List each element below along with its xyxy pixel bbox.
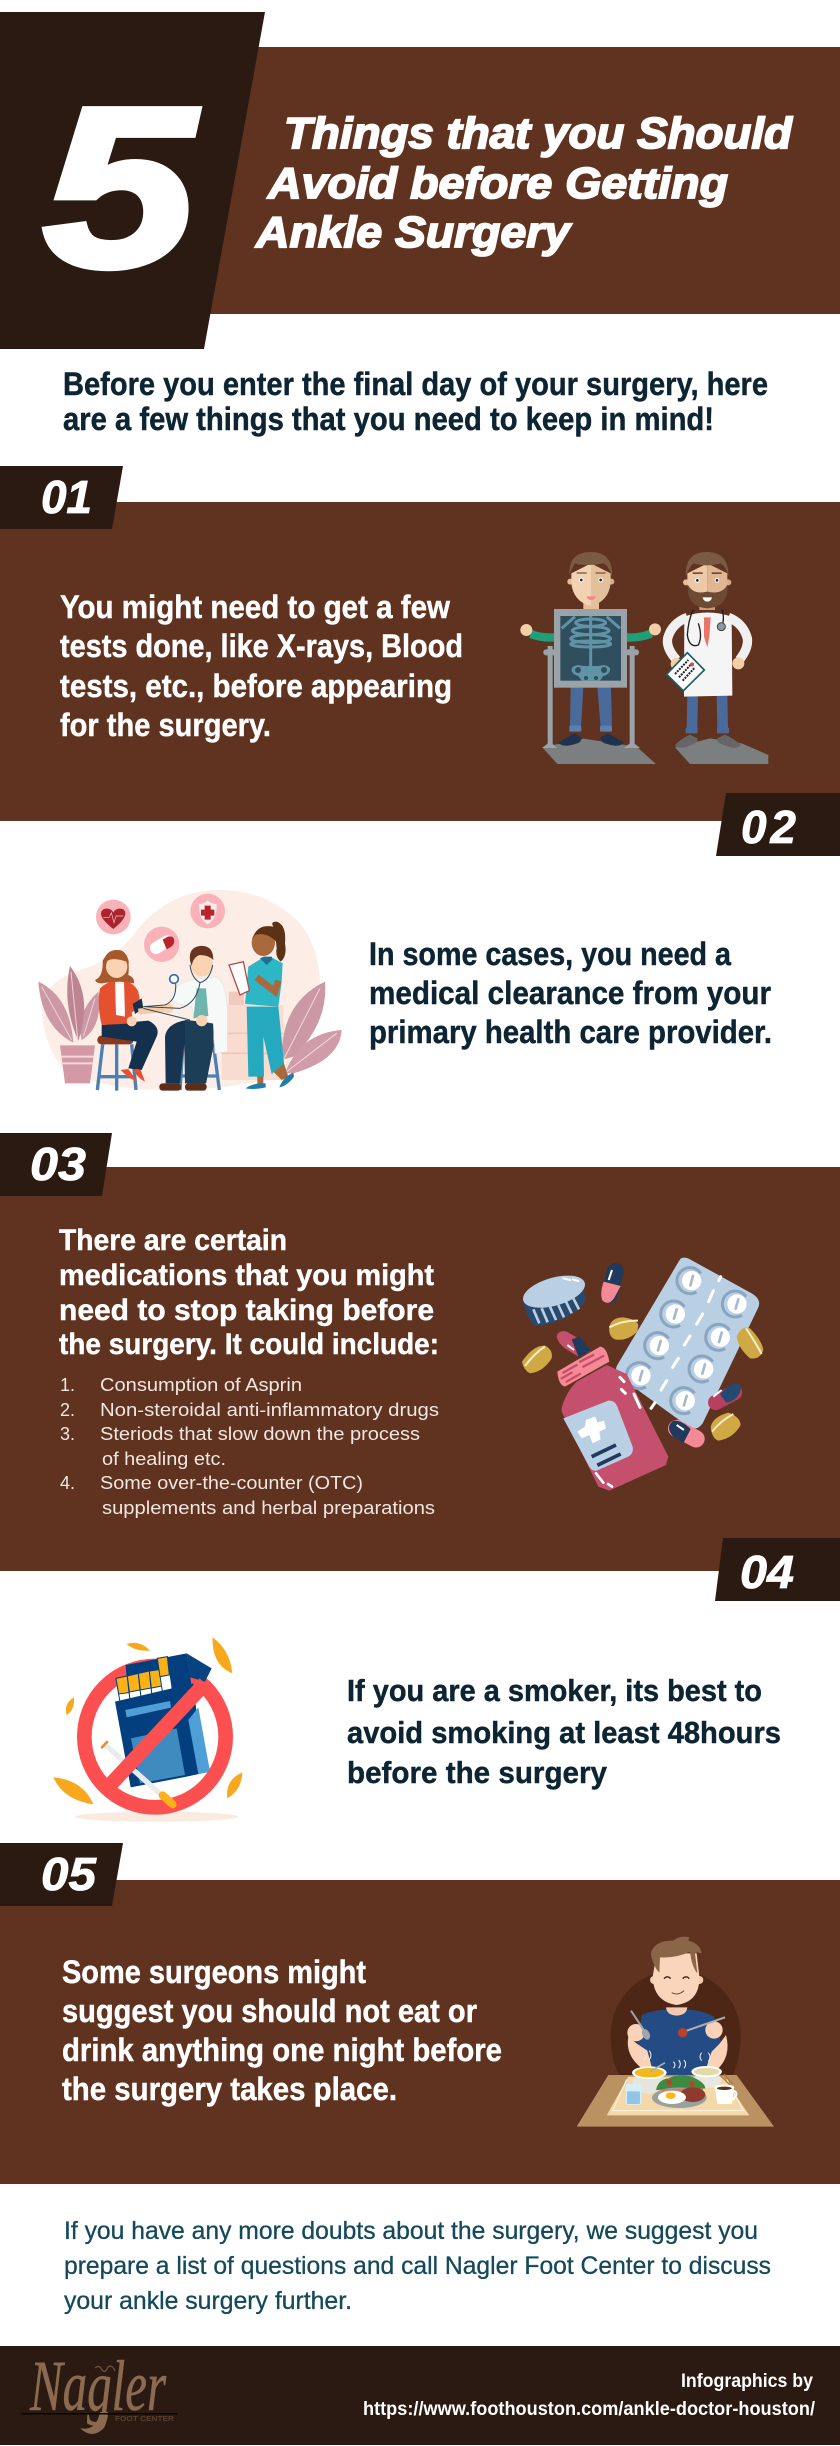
big number 5: 5: [43, 61, 199, 315]
step 02 text: [369, 936, 772, 1050]
step 03 heading text: need to stop taking before: [59, 1294, 434, 1327]
step 04 text: avoid smoking at least 48hours: [347, 1715, 781, 1750]
step 05 text: suggest you should not eat or: [62, 1993, 477, 2029]
step 01 number tag: 01: [41, 471, 92, 523]
logo: Nagler Foot Center: Nagler: [29, 2346, 167, 2426]
credit text: [363, 2371, 816, 2420]
step 02 text: medical clearance from your: [369, 975, 771, 1011]
medication list: of healing etc.: [102, 1449, 226, 1469]
medication list: 3.: [60, 1424, 75, 1444]
closing text: prepare a list of questions and call Nagler Foot Center to discuss: [64, 2252, 771, 2280]
step 05 number tag: [0, 1843, 123, 1906]
header brown band: [150, 47, 840, 314]
intro text: Before you enter the final day of your surgery, here: [63, 366, 768, 402]
step 02 text: In some cases, you need a: [369, 936, 731, 972]
medication list: Steriods that slow down the process: [100, 1424, 420, 1444]
step 05 text: Some surgeons might: [62, 1954, 366, 1990]
illustration: pills and bottle: [519, 1258, 763, 1491]
step 05 text: [62, 1954, 502, 2107]
step 03 heading text: the surgery. It could include:: [59, 1328, 439, 1361]
step 03 background: [0, 1167, 840, 1571]
step 03 heading text: There are certain: [59, 1224, 287, 1257]
closing text: If you have any more doubts about the surgery, we suggest you: [64, 2217, 758, 2245]
step 02 number tag: [716, 793, 840, 856]
step 04 number tag: 04: [740, 1546, 794, 1598]
title: [255, 109, 793, 257]
step 01 text: You might need to get a few: [60, 589, 450, 625]
logo: Nagler Foot Center: FOOT CENTER: [115, 2414, 175, 2423]
medication list: Non-steroidal anti-inflammatory drugs: [100, 1400, 439, 1420]
closing text: your ankle surgery further.: [64, 2287, 352, 2315]
title: Things that you Should: [284, 109, 793, 158]
step 02 text: primary health care provider.: [369, 1014, 772, 1050]
intro text: [63, 366, 768, 437]
medication list: 2.: [60, 1400, 75, 1420]
medication list: [60, 1375, 439, 1518]
step 01 text: [60, 589, 463, 743]
panel: step 02: [38, 890, 772, 1091]
step 04 number tag: [715, 1538, 840, 1601]
panel: step 04: [53, 1637, 781, 1822]
step 03 heading text: [59, 1224, 439, 1361]
title: Ankle Surgery: [255, 208, 573, 257]
step 05 text: drink anything one night before: [62, 2032, 502, 2068]
illustration: no smoking: [53, 1637, 242, 1822]
illustration: medical clearance visit: [38, 890, 342, 1091]
step 01 text: for the surgery.: [60, 707, 271, 743]
panel: step 01: [0, 466, 840, 856]
medication list: Consumption of Asprin: [100, 1375, 302, 1395]
medication list: supplements and herbal preparations: [102, 1498, 435, 1518]
closing text: [64, 2217, 771, 2315]
credit text: Infographics by: [681, 2371, 813, 2392]
panel: header: [0, 12, 840, 349]
step 01 background: [0, 502, 840, 821]
medication list: 1.: [60, 1375, 75, 1395]
step 04 text: [347, 1673, 781, 1790]
panel: step 03: [0, 1133, 840, 1601]
panel: footer: [0, 2346, 840, 2445]
step 05 number tag: 05: [41, 1848, 98, 1900]
step 03 heading text: medications that you might: [59, 1259, 434, 1292]
step 01 text: tests done, like X-rays, Blood: [60, 628, 463, 664]
medication list: 4.: [60, 1473, 75, 1493]
step 02 number tag: 02: [741, 801, 796, 853]
title: Avoid before Getting: [267, 159, 728, 208]
credit text: https://www.foothouston.com/ankle-doctor-houston/: [363, 2399, 816, 2420]
step 01 number tag: [0, 466, 123, 529]
logo: Nagler Foot Center: [21, 2346, 178, 2434]
step 01 text: tests, etc., before appearing: [60, 668, 452, 704]
footer background: [0, 2346, 840, 2445]
step 03 number tag: [0, 1133, 112, 1196]
panel: step 05: [0, 1843, 840, 2184]
step 05 text: the surgery takes place.: [62, 2071, 397, 2107]
illustration: x-ray patient and doctor: [520, 552, 768, 764]
medication list: Some over-the-counter (OTC): [100, 1473, 363, 1493]
illustration: man eating meal: [577, 1937, 774, 2127]
intro text: are a few things that you need to keep in mind!: [63, 401, 714, 437]
step 04 text: before the surgery: [347, 1755, 608, 1790]
step 05 background: [0, 1880, 840, 2184]
step 03 number tag: 03: [30, 1138, 86, 1190]
step 04 text: If you are a smoker, its best to: [347, 1673, 762, 1708]
header dark slanted block: [0, 12, 265, 349]
